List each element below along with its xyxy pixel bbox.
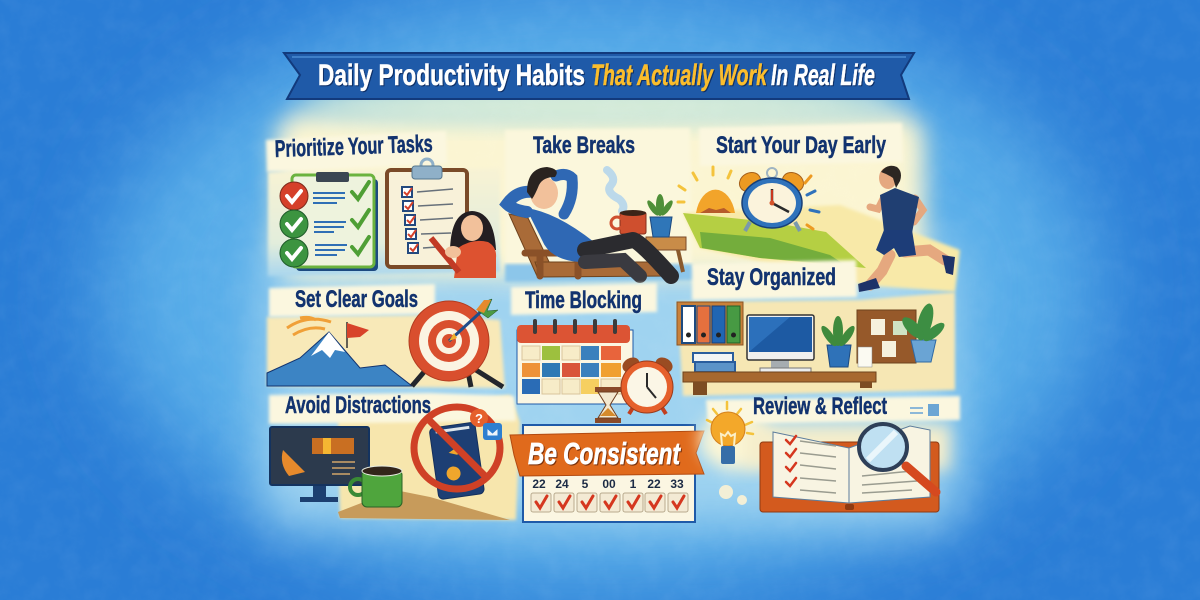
heading: stay organized: Stay Organized: [707, 264, 836, 291]
icon: target with arrow: [409, 299, 503, 387]
icon: leafy plant: [899, 302, 947, 362]
icon: rising sun: [678, 167, 735, 213]
panel: set clear goals: [267, 284, 505, 388]
icon: computer monitor: [270, 427, 369, 502]
icon: book stack: [693, 353, 735, 372]
figure: woman writing: [431, 211, 496, 278]
panel: be consistent: [510, 425, 704, 522]
panel: time blocking: [511, 283, 675, 423]
panel: review and reflect: [700, 393, 960, 512]
icon: alarm clock: [736, 168, 819, 231]
calendar strip: 5: [582, 477, 589, 491]
decoration: steam: [607, 170, 623, 211]
icon: green checklist clipboard: [280, 172, 378, 271]
icon: mountain with flag: [267, 322, 412, 386]
icon: red mug: [611, 210, 646, 234]
calendar strip: 1: [630, 477, 637, 491]
calendar strip: 00: [602, 477, 616, 491]
icon: magnifying glass: [859, 424, 936, 492]
icon: crossed-out phone: [414, 407, 500, 500]
icon: light bulb: [707, 402, 753, 505]
heading: prioritize: Prioritize Your Tasks: [274, 130, 433, 163]
icon: open book: [760, 426, 939, 512]
heading: set clear goals: Set Clear Goals: [295, 286, 418, 313]
furniture: side table: [646, 237, 686, 272]
calendar strip: 22: [647, 477, 661, 491]
calendar strip: 22: [532, 477, 546, 491]
title text: white part: Daily Productivity Habits: [318, 59, 585, 92]
icon: notification bubbles: ?: [475, 411, 483, 426]
heading: avoid distractions: Avoid Distractions: [285, 392, 431, 419]
icon: binder shelf: [677, 302, 743, 345]
icon: corkboard with notes: [857, 310, 916, 367]
icon: small plant: [819, 316, 857, 367]
decoration: orange wind swooshes: [287, 317, 331, 335]
icon: green mug: [350, 466, 402, 507]
icon: desktop computer: [747, 315, 814, 373]
heading: review and reflect: Review & Reflect: [753, 393, 887, 420]
figure: man relaxing in chair: [507, 167, 671, 277]
panel: avoid distractions: [269, 392, 520, 520]
small note icon: [910, 404, 939, 416]
figure: runner: [858, 166, 955, 292]
icon: hourglass: [595, 387, 621, 423]
title banner: [284, 53, 914, 99]
icon: brown clipboard: [387, 159, 467, 267]
heading: take breaks: Take Breaks: [533, 132, 635, 159]
icon: weekly calendar: [517, 321, 633, 404]
icon: notification bubbles: [470, 409, 502, 440]
panel: start your day early: [678, 123, 960, 292]
calendar strip: [523, 425, 695, 522]
title text: yellow part: That Actually Work: [591, 59, 768, 92]
heading: be consistent: Be Consistent: [528, 436, 681, 471]
icon: orange alarm clock: [620, 354, 675, 414]
orange ribbon: [510, 431, 704, 476]
panel: prioritize your tasks: [266, 130, 500, 278]
calendar strip: 24: [555, 477, 569, 491]
panel: stay organized: [677, 260, 955, 396]
calendar strip: 33: [670, 477, 684, 491]
heading: start your day early: Start Your Day Early: [716, 132, 886, 159]
title text: closing part: In Real Life: [771, 59, 875, 92]
icon: plant: [645, 194, 675, 237]
desk: [683, 372, 876, 395]
landscape: grass: [683, 205, 960, 292]
panel: take breaks: [505, 128, 700, 282]
heading: time blocking: Time Blocking: [525, 287, 642, 314]
